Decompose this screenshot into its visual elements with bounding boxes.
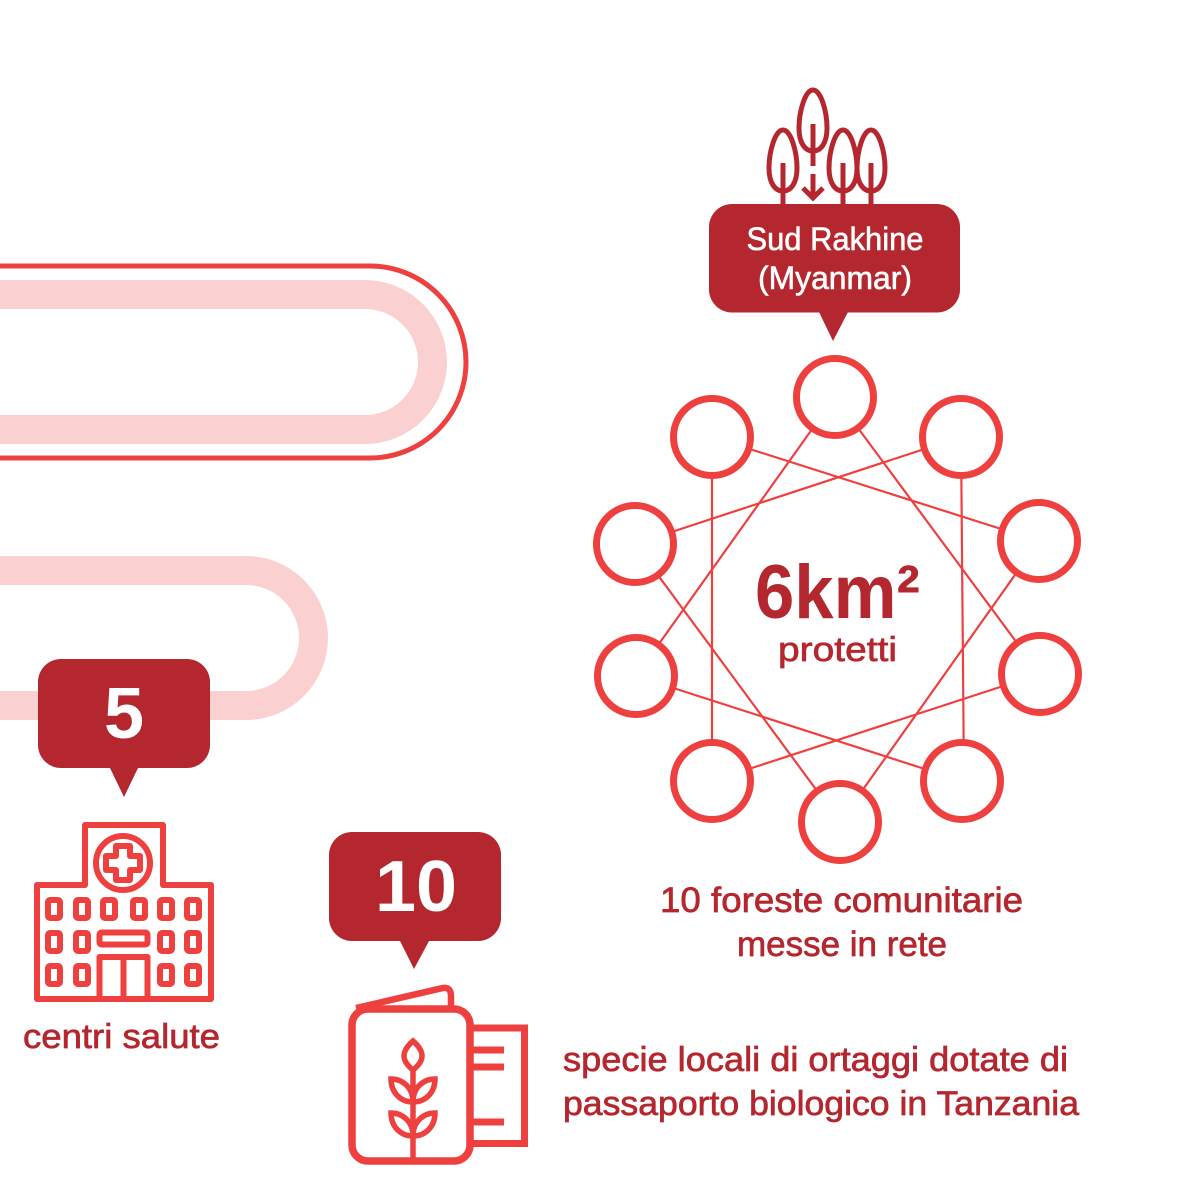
caption: community forests: [660, 881, 1023, 964]
callout: 5: [38, 659, 210, 797]
callout: Sud Rakhine (Myanmar): [709, 204, 960, 341]
callout: 10: 10: [375, 847, 457, 927]
stat: 6km² protected: 6km²: [755, 550, 920, 635]
network connecting lines: [635, 397, 1040, 822]
text: local vegetable species: passaporto biologico in Tanzania: [563, 1085, 1079, 1123]
callout: 5: 5: [104, 674, 144, 754]
stat: 6km² protected: [755, 550, 920, 669]
caption: community forests: messe in rete: [737, 925, 947, 964]
caption: community forests: 10 foreste comunitarie: [660, 881, 1023, 920]
lower winding track: [0, 570, 314, 706]
text: local vegetable species: specie locali di ortaggi dotate di: [563, 1041, 1068, 1079]
icon: biological passport: [352, 988, 524, 1161]
callout: Sud Rakhine (Myanmar): Sud Rakhine: [746, 221, 924, 257]
icon: hospital: [37, 825, 211, 999]
callout: 10: [329, 832, 501, 969]
network nodes: [596, 358, 1078, 860]
network of 10 community forests: [596, 358, 1078, 860]
stat: 6km² protected: protetti: [778, 631, 897, 669]
text: local vegetable species: [563, 1041, 1079, 1123]
label: health centres: centri salute: [23, 1018, 220, 1056]
upper winding track: [0, 266, 466, 458]
icon: trees with arrow: [769, 90, 885, 206]
callout: Sud Rakhine (Myanmar): (Myanmar): [758, 260, 912, 296]
